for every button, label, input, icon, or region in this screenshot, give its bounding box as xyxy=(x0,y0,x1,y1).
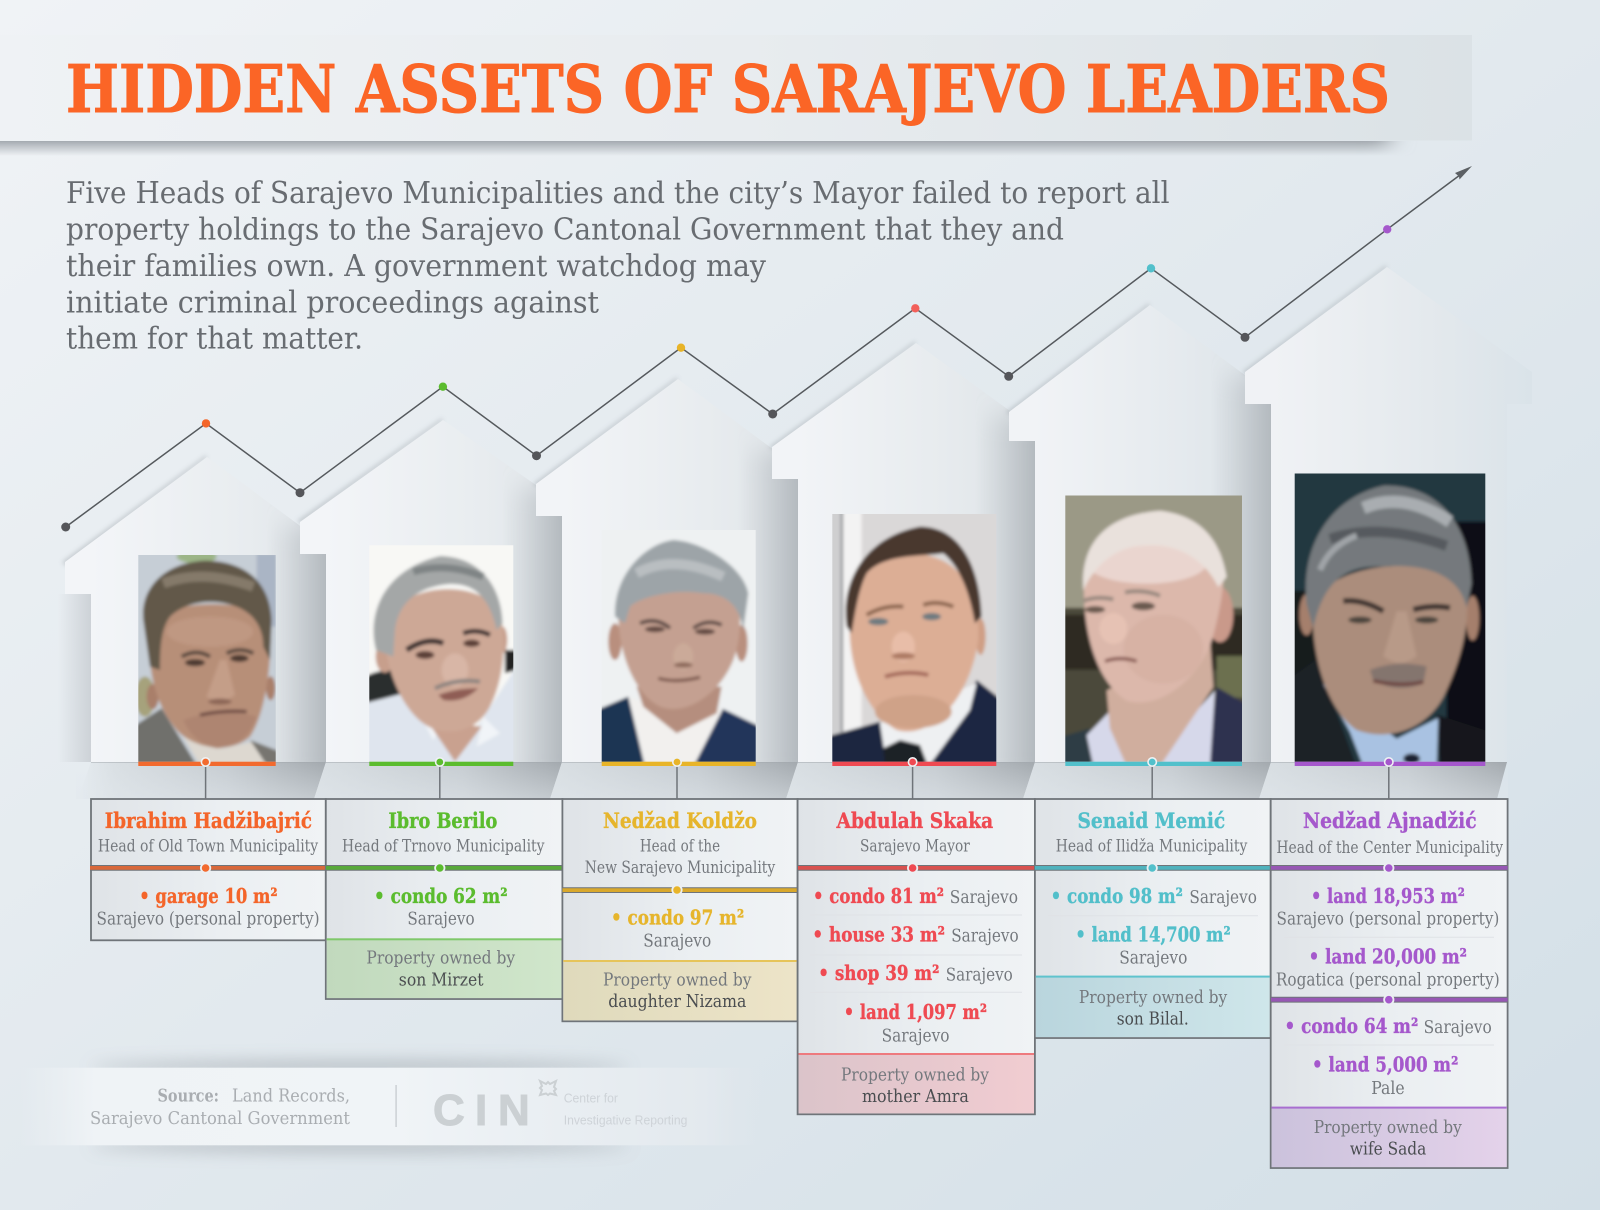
panel: Nedžad Koldžo: Head of the xyxy=(640,836,720,856)
portrait: Nedžad Koldžo xyxy=(597,525,760,767)
panel: Senaid Memić xyxy=(1035,799,1271,1038)
CIN logo xyxy=(433,1081,687,1135)
panel: Nedžad Koldžo: daughter Nizama xyxy=(608,991,747,1012)
intro text block: them for that matter. xyxy=(66,322,363,356)
panel: Senaid Memić: • land 14,700 m² xyxy=(1075,922,1231,946)
growth line chart with arrow xyxy=(61,166,1472,532)
panel: Nedžad Koldžo: Nedžad Koldžo xyxy=(603,809,757,834)
panel: Abdulah Skaka: • condo 81 m² xyxy=(813,884,944,908)
portrait: Nedžad Ajnadžić xyxy=(1290,468,1490,766)
house 3 xyxy=(534,378,798,762)
source footer: Sarajevo Cantonal Government xyxy=(90,1108,351,1129)
panel: Ibro Berilo: Sarajevo xyxy=(407,910,475,930)
panel: Abdulah Skaka: • shop 39 m² xyxy=(818,961,940,985)
floor shadow band xyxy=(76,761,1508,799)
panel: Nedžad Ajnadžić: Sarajevo xyxy=(1424,1018,1492,1038)
panel: Nedžad Ajnadžić: • condo 64 m² xyxy=(1284,1014,1418,1038)
panel: Abdulah Skaka: Sarajevo xyxy=(946,965,1013,985)
panel: Ibrahim Hadžibajrić: Sarajevo (personal property) xyxy=(96,910,320,930)
connectors and colour bars under portraits xyxy=(138,758,1485,799)
panel: Nedžad Koldžo xyxy=(562,799,798,1021)
panel: Abdulah Skaka: Sarajevo Mayor xyxy=(860,836,971,856)
panel: Ibrahim Hadžibajrić: • garage 10 m² xyxy=(139,884,278,908)
panel: Ibrahim Hadžibajrić: Head of Old Town Municipality xyxy=(98,836,319,856)
panel: Ibro Berilo: Property owned by xyxy=(366,948,516,969)
panel: Abdulah Skaka: • house 33 m² xyxy=(812,922,945,946)
panel: Abdulah Skaka: • land 1,097 m² xyxy=(844,1000,987,1024)
panel: Nedžad Koldžo: • condo 97 m² xyxy=(611,906,744,930)
house 5 xyxy=(1006,304,1271,762)
portrait: Abdulah Skaka xyxy=(827,508,1002,767)
intro text block: their families own. A government watchdog may xyxy=(66,249,766,283)
panel: Senaid Memić: Head of Ilidža Municipality xyxy=(1056,836,1248,856)
panel: Nedžad Ajnadžić: Nedžad Ajnadžić xyxy=(1303,809,1477,834)
panel: Ibro Berilo: Head of Trnovo Municipality xyxy=(342,836,545,856)
source footer: Source: xyxy=(158,1085,219,1106)
panel: Nedžad Ajnadžić: Property owned by xyxy=(1314,1117,1463,1138)
panel: Nedžad Ajnadžić: • land 20,000 m² xyxy=(1309,944,1467,968)
portrait: Ibrahim Hadžibajrić xyxy=(138,555,276,762)
source footer: Land Records, xyxy=(232,1085,350,1106)
panel: Ibro Berilo: Ibro Berilo xyxy=(388,809,497,834)
panel: Nedžad Koldžo: New Sarajevo Municipality xyxy=(585,858,776,878)
panel: Ibro Berilo xyxy=(326,799,562,999)
intro text block: initiate criminal proceedings against xyxy=(66,286,599,320)
panel: Nedžad Ajnadžić xyxy=(1271,799,1508,1168)
panel: Abdulah Skaka: Sarajevo xyxy=(882,1026,950,1046)
panel: Nedžad Ajnadžić: • land 5,000 m² xyxy=(1312,1052,1458,1076)
CIN logo: Investigative Reporting xyxy=(564,1112,687,1127)
title: HIDDEN ASSETS OF SARAJEVO LEADERS xyxy=(66,52,1390,128)
panel: Nedžad Ajnadžić: Rogatica (personal property) xyxy=(1276,970,1500,990)
CIN logo: Center for xyxy=(564,1091,619,1106)
panel: Ibro Berilo: • condo 62 m² xyxy=(374,884,508,908)
panel: Abdulah Skaka: Sarajevo xyxy=(951,927,1019,947)
house 2 xyxy=(298,418,562,762)
panel: Senaid Memić: Sarajevo xyxy=(1189,888,1257,908)
panel: Abdulah Skaka xyxy=(798,799,1035,1114)
house 4 xyxy=(770,342,1035,762)
panel: Nedžad Ajnadžić: • land 18,953 m² xyxy=(1311,884,1465,908)
panel: Nedžad Ajnadžić: Head of the Center Municipality xyxy=(1276,838,1503,858)
intro text block: property holdings to the Sarajevo Cantonal Government that they and xyxy=(66,212,1064,246)
panel: Ibrahim Hadžibajrić: Ibrahim Hadžibajrić xyxy=(105,809,312,834)
panel: Senaid Memić: Property owned by xyxy=(1079,987,1228,1008)
CIN logo: CIN xyxy=(433,1086,530,1135)
panel: Senaid Memić: Sarajevo xyxy=(1119,949,1187,969)
panel: Nedžad Koldžo: Property owned by xyxy=(603,969,752,990)
panel: Abdulah Skaka: Sarajevo xyxy=(950,888,1018,908)
intro text block: Five Heads of Sarajevo Municipalities and the city’s Mayor failed to report all xyxy=(66,176,1170,210)
panel: Abdulah Skaka: mother Amra xyxy=(862,1086,969,1107)
panel: Ibrahim Hadžibajrić xyxy=(90,799,326,940)
panel: Abdulah Skaka: Abdulah Skaka xyxy=(836,809,993,834)
source footer xyxy=(20,1061,765,1152)
panel: Senaid Memić: son Bilal. xyxy=(1117,1009,1189,1030)
panel: Ibro Berilo: son Mirzet xyxy=(399,969,484,990)
panel: Nedžad Ajnadžić: wife Sada xyxy=(1350,1139,1427,1160)
portrait: Ibro Berilo xyxy=(365,540,518,767)
portrait: Senaid Memić xyxy=(1060,491,1247,766)
panel: Nedžad Ajnadžić: Pale xyxy=(1371,1079,1405,1099)
house 6 xyxy=(1242,265,1532,762)
panel: Senaid Memić: • condo 98 m² xyxy=(1051,884,1183,908)
panel: Nedžad Koldžo: Sarajevo xyxy=(643,931,711,951)
title band xyxy=(0,35,1472,156)
panel: Nedžad Ajnadžić: Sarajevo (personal property) xyxy=(1276,910,1499,930)
intro text block xyxy=(66,176,1170,356)
house 1 xyxy=(62,456,326,762)
panel: Abdulah Skaka: Property owned by xyxy=(841,1064,990,1085)
panel: Senaid Memić: Senaid Memić xyxy=(1078,809,1225,834)
